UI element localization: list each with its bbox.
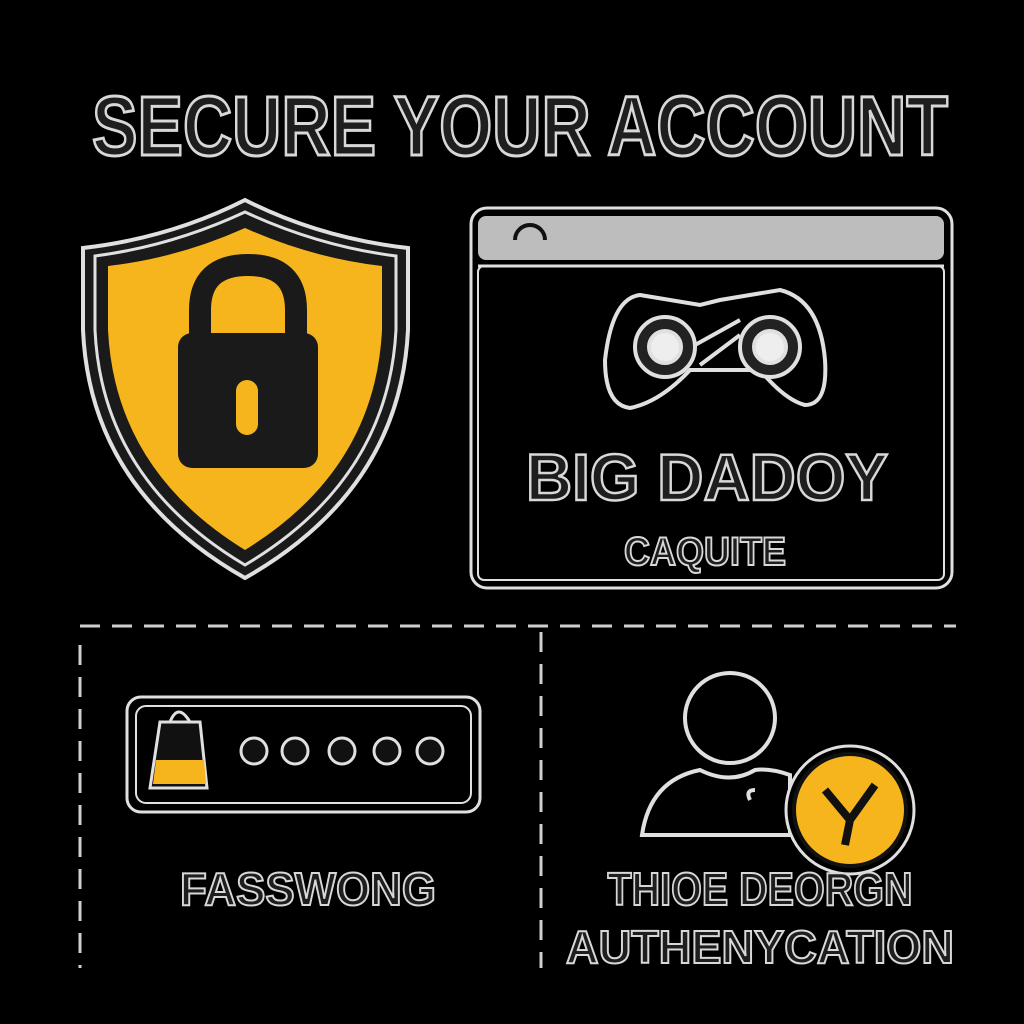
text: CAQUITE: CAQUITE — [624, 530, 786, 574]
panel: password — [127, 697, 480, 915]
text: AUTHENYCATION: AUTHENYCATION — [566, 921, 954, 973]
text: THIOE DEORGN: THIOE DEORGN — [608, 863, 912, 915]
icon: bag lock — [150, 712, 207, 788]
icon: yellow check badge — [786, 746, 914, 874]
icon: user — [642, 673, 790, 835]
panel: two-factor authentication — [566, 673, 954, 973]
panel: browser window — [471, 208, 952, 588]
password dots — [241, 738, 443, 764]
icon: gamepad — [605, 290, 825, 408]
icon: shield with lock — [83, 200, 408, 578]
text: BIG DADOY: BIG DADOY — [526, 440, 888, 514]
text: FASSWONG: FASSWONG — [180, 863, 436, 915]
icon: reload circle — [515, 225, 545, 240]
icon: padlock — [178, 265, 318, 468]
